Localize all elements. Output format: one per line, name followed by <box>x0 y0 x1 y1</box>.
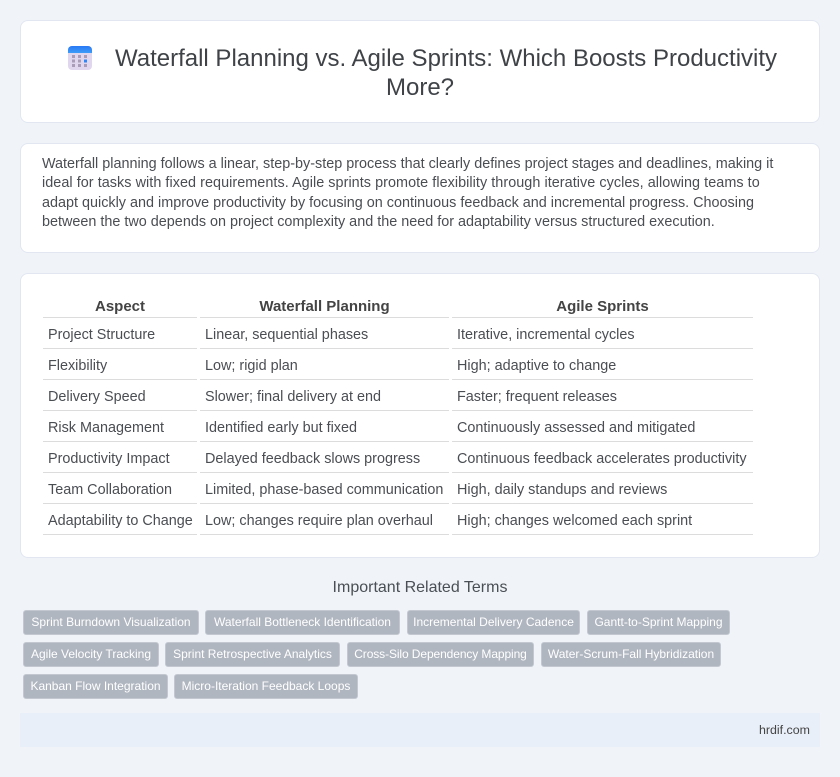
row: Risk Management: Risk Management <box>48 420 164 436</box>
row: Risk Management: Identified early but fixed <box>205 420 357 436</box>
tag: Water-Scrum-Fall Hybridization <box>548 647 714 661</box>
text block: description: Waterfall planning follows a linear, step-by-step process that clearly defines project stages and deadlines, making it <box>42 156 773 172</box>
tag <box>23 610 199 635</box>
table header: Agile Sprints <box>556 298 649 315</box>
row: Adaptability to Change <box>48 513 692 529</box>
row: Project Structure: Project Structure <box>48 327 155 343</box>
row: Delivery Speed: Faster; frequent releases <box>457 389 617 405</box>
tag <box>165 642 340 667</box>
row: Team Collaboration: Team Collaboration <box>48 482 172 498</box>
row: Risk Management <box>48 420 695 436</box>
heading: Important Related Terms: Important Related Terms <box>333 579 507 596</box>
row: Productivity Impact <box>48 451 747 467</box>
row: Team Collaboration <box>48 482 667 498</box>
row: Productivity Impact: Delayed feedback slows progress <box>205 451 420 467</box>
text block: description: adapt quickly and improve productivity by focusing on continuous feedback and incremental progress. Choosing <box>42 195 754 211</box>
row: Adaptability to Change: Adaptability to Change <box>48 513 193 529</box>
table header: Waterfall Planning <box>259 298 390 315</box>
tag <box>23 674 168 699</box>
tag <box>407 610 580 635</box>
panel: description card <box>20 143 820 253</box>
row: Project Structure <box>48 327 635 343</box>
tag <box>205 610 400 635</box>
table header: Aspect <box>95 298 145 315</box>
tag <box>174 674 358 699</box>
row: Flexibility: High; adaptive to change <box>457 358 616 374</box>
row: Team Collaboration: Limited, phase-based communication <box>205 482 443 498</box>
row: Risk Management: Continuously assessed and mitigated <box>457 420 695 436</box>
tag: Cross-Silo Dependency Mapping <box>354 647 527 661</box>
footer text: hrdif.com: hrdif.com <box>759 723 810 737</box>
title <box>115 45 777 101</box>
row: Project Structure: Iterative, incremental cycles <box>457 327 635 343</box>
row: Adaptability to Change: High; changes welcomed each sprint <box>457 513 692 529</box>
title: Waterfall Planning vs. Agile Sprints: Which Boosts Productivity <box>115 45 777 72</box>
tag: Micro-Iteration Feedback Loops <box>182 679 350 693</box>
tag: Sprint Burndown Visualization <box>31 615 191 629</box>
tag <box>347 642 534 667</box>
row: Flexibility: Flexibility <box>48 358 107 374</box>
row: Delivery Speed: Slower; final delivery at end <box>205 389 381 405</box>
tag: Incremental Delivery Cadence <box>413 615 574 629</box>
row: Flexibility <box>48 358 616 374</box>
row: Delivery Speed <box>48 389 617 405</box>
text block: description: between the two depends on project complexity and the need for adaptability versus structured execution. <box>42 214 715 230</box>
footer bar <box>20 713 820 747</box>
icon: calendar <box>68 46 92 70</box>
text block: description: ideal for tasks with fixed requirements. Agile sprints promote flexibility through iterative cycles, allowing teams to <box>42 175 760 191</box>
row: Flexibility: Low; rigid plan <box>205 358 298 374</box>
row: Productivity Impact: Productivity Impact <box>48 451 170 467</box>
comparison table <box>43 298 753 535</box>
row: Project Structure: Linear, sequential phases <box>205 327 368 343</box>
table header <box>95 298 649 315</box>
tag <box>541 642 721 667</box>
tag: Waterfall Bottleneck Identification <box>214 615 391 629</box>
panel: title card <box>20 20 820 123</box>
row: Team Collaboration: High, daily standups and reviews <box>457 482 667 498</box>
text block: description <box>42 156 774 230</box>
tag <box>23 642 159 667</box>
row: Delivery Speed: Delivery Speed <box>48 389 146 405</box>
tag: Sprint Retrospective Analytics <box>173 647 332 661</box>
tag: Gantt-to-Sprint Mapping <box>594 615 723 629</box>
title: More? <box>386 74 454 101</box>
panel: comparison table card <box>20 273 820 558</box>
tags: related terms <box>23 610 730 699</box>
tag: Kanban Flow Integration <box>30 679 161 693</box>
tag <box>587 610 730 635</box>
row: Adaptability to Change: Low; changes require plan overhaul <box>205 513 433 529</box>
tag: Agile Velocity Tracking <box>31 647 151 661</box>
row: Productivity Impact: Continuous feedback accelerates productivity <box>457 451 747 467</box>
